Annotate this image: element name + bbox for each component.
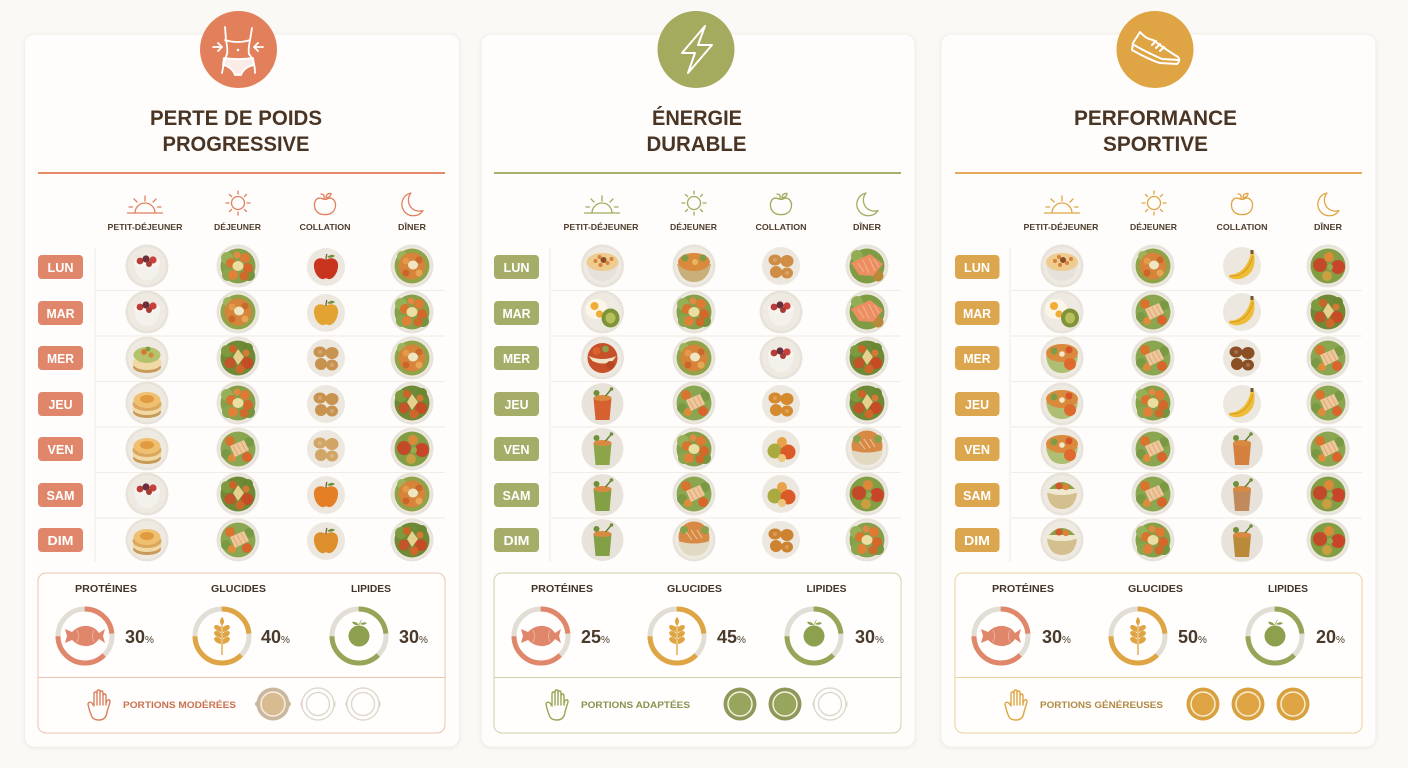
row: SAM <box>494 472 888 516</box>
title <box>150 107 322 156</box>
row: VEN <box>494 428 888 470</box>
title: PERTE DE POIDS <box>150 107 322 130</box>
macro: lipides: 20% <box>1316 627 1345 647</box>
panel card <box>941 34 1376 747</box>
row: LUN <box>955 244 1350 288</box>
header: dîner: DÎNER <box>853 221 881 232</box>
row: LUN: LUN <box>964 261 990 275</box>
header: déjeuner: DÉJEUNER <box>214 222 261 232</box>
macro: glucides: 45% <box>717 627 746 647</box>
header: petit-déjeuner: PETIT-DÉJEUNER <box>108 222 182 232</box>
header: collation: COLLATION <box>300 222 350 232</box>
panel card <box>24 34 460 747</box>
title: ÉNERGIE <box>652 107 742 130</box>
header: petit-déjeuner <box>1024 196 1098 232</box>
title <box>646 107 746 156</box>
title: SPORTIVE <box>1103 133 1208 156</box>
icon: waist <box>200 11 277 88</box>
macros and portions box <box>955 573 1362 733</box>
portion plates <box>1186 688 1310 720</box>
macro: glucides: GLUCIDES <box>667 583 722 595</box>
row: MER <box>955 336 1350 380</box>
macro: protéines <box>514 582 610 663</box>
row: MAR: MAR <box>502 307 530 321</box>
row: JEU: JEU <box>965 398 989 412</box>
row: DIM: DIM <box>504 534 530 548</box>
portion label: PORTIONS MODÉRÉES <box>123 700 236 711</box>
title: PERFORMANCE <box>1074 107 1237 130</box>
header: collation: COLLATION <box>756 222 806 232</box>
macro: glucides: 50% <box>1178 627 1207 647</box>
row: SAM <box>955 472 1350 516</box>
row: VEN: VEN <box>964 443 990 457</box>
row: DIM: DIM <box>964 534 990 548</box>
macro: lipides: LIPIDES <box>351 583 391 595</box>
header: dîner: DÎNER <box>1314 221 1342 232</box>
icon: lightning <box>658 11 734 88</box>
row: DIM <box>494 518 888 562</box>
row: VEN: VEN <box>48 443 74 457</box>
header: petit-déjeuner <box>108 196 182 232</box>
header: petit-déjeuner: PETIT-DÉJEUNER <box>564 222 638 232</box>
header: dîner <box>1314 193 1342 232</box>
portion label: PORTIONS ADAPTÉES <box>581 700 690 711</box>
row: LUN: LUN <box>48 261 74 275</box>
row: MAR <box>38 290 434 334</box>
macro: lipides: LIPIDES <box>1268 583 1308 595</box>
row: MAR <box>494 290 888 334</box>
macro: lipides <box>332 583 428 663</box>
row: DIM: DIM <box>48 534 74 548</box>
header: dîner: DÎNER <box>398 221 426 232</box>
row: JEU: JEU <box>504 398 528 412</box>
meal headers <box>108 191 426 232</box>
macro: lipides <box>787 583 884 663</box>
row: VEN: VEN <box>504 443 530 457</box>
icon: running shoe <box>1116 11 1194 88</box>
row: VEN <box>955 428 1350 470</box>
macro: protéines: 25% <box>581 627 610 647</box>
panel card <box>481 34 915 747</box>
row: MER <box>38 336 434 380</box>
header: déjeuner <box>670 191 717 232</box>
header: déjeuner: DÉJEUNER <box>1130 222 1177 232</box>
macro: protéines: PROTÉINES <box>531 582 593 595</box>
row: MER <box>494 336 888 380</box>
macro: glucides: GLUCIDES <box>211 583 266 595</box>
portion plates <box>724 688 847 720</box>
row: VEN <box>38 428 434 470</box>
row: JEU: JEU <box>48 398 72 412</box>
header: collation <box>756 193 806 232</box>
panel: performance sportive <box>941 11 1376 747</box>
title <box>1074 107 1237 156</box>
row: SAM: SAM <box>963 489 991 503</box>
icon: hand <box>546 690 568 720</box>
macro: protéines <box>974 582 1071 663</box>
macro: glucides: 40% <box>261 627 290 647</box>
header: déjeuner <box>1130 191 1177 232</box>
row: LUN: LUN <box>504 261 530 275</box>
header: déjeuner: DÉJEUNER <box>670 222 717 232</box>
macro: glucides: GLUCIDES <box>1128 583 1183 595</box>
meal headers <box>564 191 881 232</box>
row: JEU <box>955 382 1350 426</box>
portion plates <box>255 688 380 720</box>
macros and portions box <box>38 573 445 733</box>
header: petit-déjeuner <box>564 196 638 232</box>
macros and portions box <box>494 573 901 733</box>
row: MER: MER <box>47 352 74 366</box>
panel: énergie durable <box>481 11 915 747</box>
row: MAR: MAR <box>46 307 74 321</box>
title: DURABLE <box>646 133 746 156</box>
row: SAM: SAM <box>502 489 530 503</box>
row: MAR: MAR <box>963 307 991 321</box>
macro: protéines <box>58 582 154 663</box>
row: DIM <box>955 518 1350 562</box>
header: déjeuner <box>214 191 261 232</box>
header: collation <box>300 193 350 232</box>
row: LUN <box>494 244 888 288</box>
macro: lipides: LIPIDES <box>806 583 846 595</box>
row: JEU <box>494 382 888 425</box>
panel: perte de poids progressive <box>24 11 460 747</box>
macro: protéines: PROTÉINES <box>992 582 1054 595</box>
macro: protéines: 30% <box>125 627 154 647</box>
row: MAR <box>955 290 1350 334</box>
row: MER: MER <box>503 352 530 366</box>
icon: hand <box>1005 690 1027 720</box>
portion label: PORTIONS GÉNÉREUSES <box>1040 700 1163 711</box>
header: dîner <box>853 193 881 232</box>
header: dîner <box>398 193 426 232</box>
row: SAM <box>38 472 434 516</box>
row: SAM: SAM <box>46 489 74 503</box>
macro: protéines: PROTÉINES <box>75 582 137 595</box>
macro: glucides <box>1111 583 1207 663</box>
title: PROGRESSIVE <box>162 133 310 156</box>
row: MER: MER <box>964 352 990 366</box>
macro: lipides: 30% <box>399 627 428 647</box>
meal headers <box>1024 191 1342 232</box>
row: LUN <box>38 244 434 288</box>
row: JEU <box>38 382 434 424</box>
macro: protéines: 30% <box>1042 627 1071 647</box>
macro: lipides: 30% <box>855 627 884 647</box>
icon: hand <box>88 690 110 720</box>
row: DIM <box>38 518 434 562</box>
macro: lipides <box>1248 583 1345 663</box>
macro: glucides <box>650 583 746 663</box>
macro: glucides <box>195 583 290 663</box>
header: collation <box>1216 193 1268 232</box>
header: collation: COLLATION <box>1216 222 1268 232</box>
header: petit-déjeuner: PETIT-DÉJEUNER <box>1024 222 1098 232</box>
